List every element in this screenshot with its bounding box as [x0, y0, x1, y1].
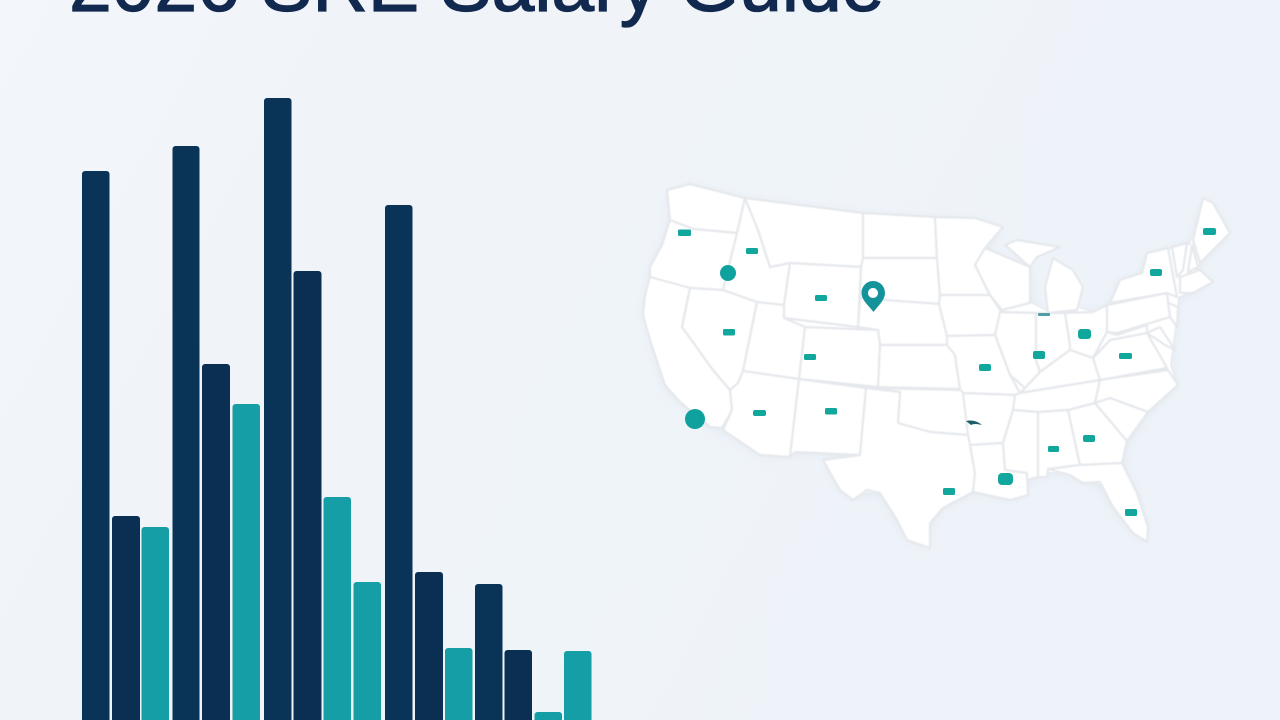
marker: Virginia [1119, 353, 1132, 359]
marker: Louisiana [998, 473, 1013, 485]
marker: New Mexico [825, 408, 837, 414]
marker: Washington/Oregon [678, 230, 691, 236]
marker: Boise circle [720, 265, 736, 281]
bar chart [82, 98, 592, 720]
bar 1 [82, 171, 110, 720]
bar 13 [445, 648, 472, 720]
marker: Maine [1203, 228, 1216, 235]
icon: location pin [862, 281, 885, 312]
marker: Florida [1125, 509, 1137, 516]
marker: Nevada [723, 329, 735, 336]
marker: Texas [943, 488, 955, 495]
bar 16 [534, 712, 562, 720]
marker: New York [1150, 269, 1162, 276]
bar 8 [294, 271, 322, 720]
white land silhouette [645, 186, 1228, 546]
US map [643, 184, 1230, 548]
marker: Indiana [1033, 351, 1045, 359]
marker: Alabama [1048, 446, 1059, 452]
state borders [643, 184, 1230, 548]
marker: Michigan sliver [1038, 313, 1050, 316]
bar 6 [232, 404, 260, 720]
marker: Arizona [753, 410, 766, 416]
marker: Georgia [1083, 435, 1095, 442]
bar 9 [324, 497, 351, 720]
bar 14 [475, 584, 502, 720]
marker: Idaho [746, 248, 758, 254]
bar 3 [142, 527, 169, 720]
bar 5 [202, 364, 230, 720]
bar 7 [264, 98, 292, 720]
marker: California circle [685, 409, 705, 429]
bar 15 [504, 650, 532, 720]
markers [678, 228, 1216, 516]
bar 17 [564, 651, 592, 720]
bar 2 [112, 516, 140, 720]
bar 12 [415, 572, 443, 720]
marker: Arkansas sliver [966, 420, 982, 425]
marker: Missouri [979, 364, 991, 371]
marker: Ohio [1078, 329, 1091, 339]
bar 4 [172, 146, 200, 720]
marker: Wyoming [815, 295, 827, 301]
bar 11 [385, 205, 412, 720]
bar 10 [354, 582, 381, 720]
marker: Utah [804, 354, 816, 360]
